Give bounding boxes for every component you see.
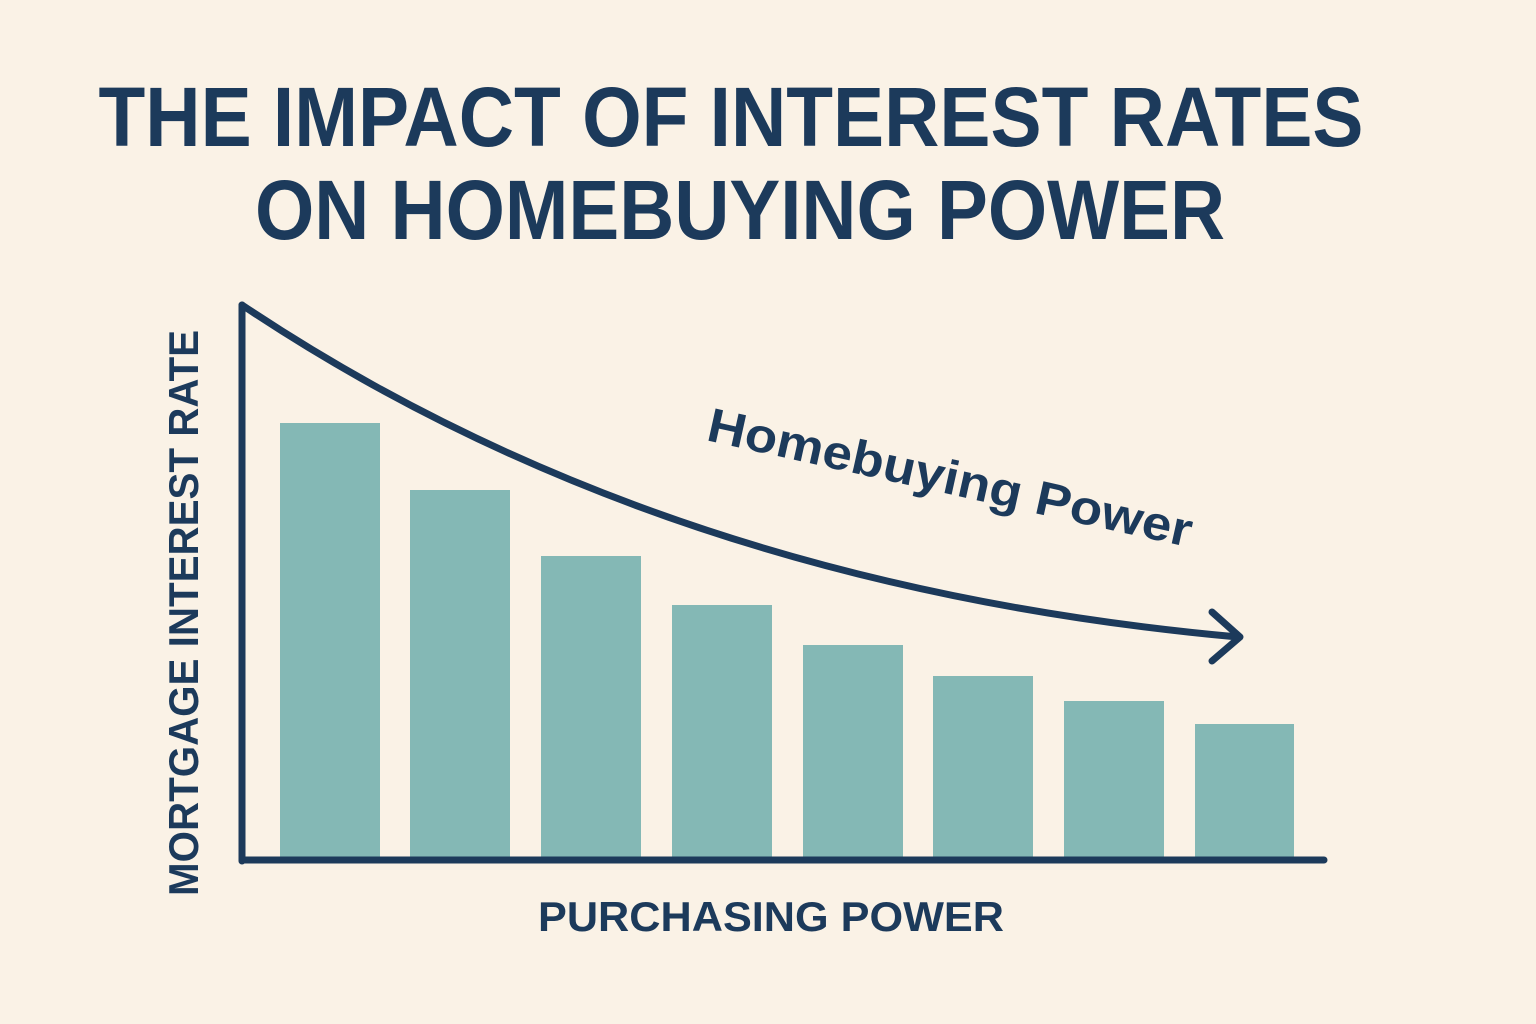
title: ON HOMEBUYING POWER [255,163,1225,257]
y-axis label: MORTGAGE INTEREST RATE [160,330,207,896]
arrow: homebuying power curve [242,305,1240,661]
bar chart [280,423,1294,858]
title: THE IMPACT OF INTEREST RATES [98,70,1364,164]
curve label: Homebuying Power [703,399,1197,558]
axes [242,305,1324,861]
x-axis label: PURCHASING POWER [538,893,1004,940]
title [98,70,1364,257]
